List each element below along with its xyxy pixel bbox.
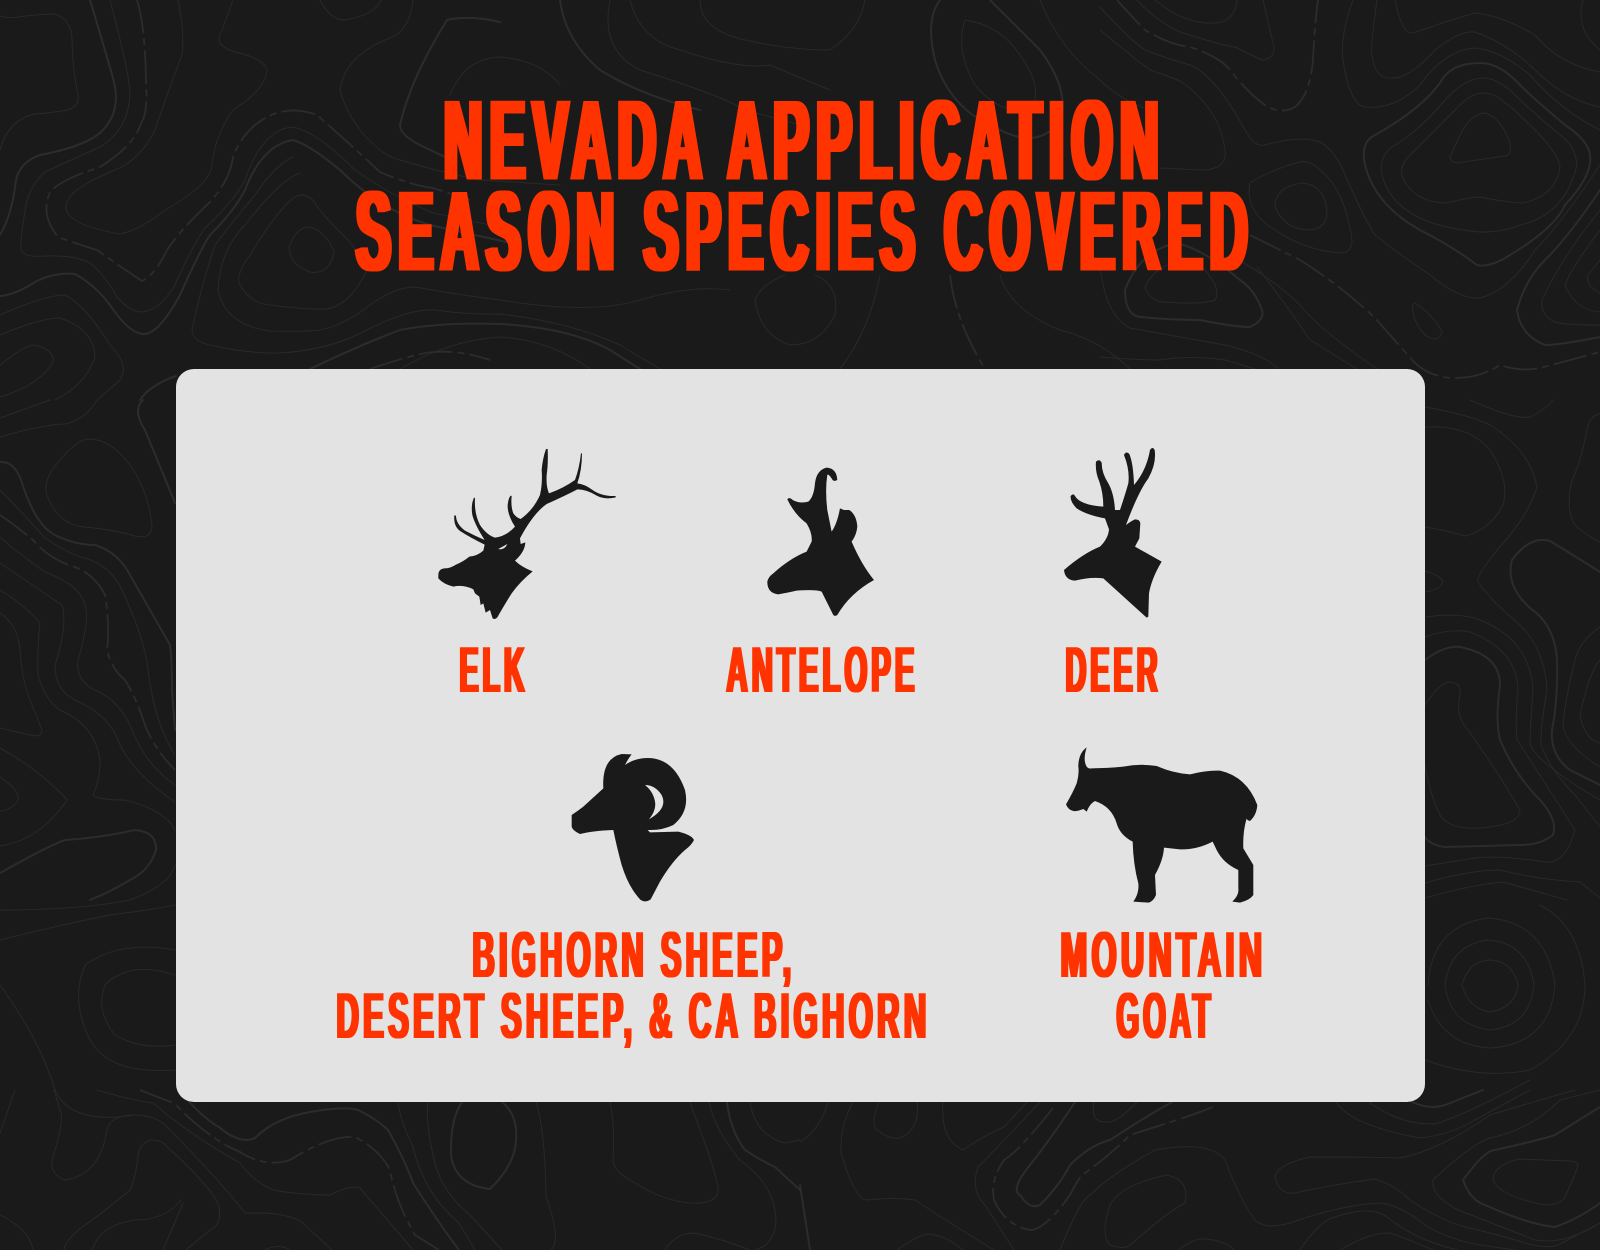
- species: mountain goat: [1060, 747, 1266, 1052]
- label: BIGHORN SHEEP line and DESERT SHEEP line: BIGHORN SHEEP,: [472, 918, 796, 991]
- species: antelope: [726, 468, 918, 706]
- label: BIGHORN SHEEP line and DESERT SHEEP line: [336, 918, 930, 1052]
- species: deer: [1064, 448, 1162, 706]
- icon: mountain goat: [1066, 747, 1257, 903]
- title: [356, 78, 1255, 296]
- species: bighorn sheep: [336, 754, 930, 1052]
- panel: species covered: ANTELOPE: [726, 633, 918, 706]
- panel: species covered: [176, 369, 1425, 1102]
- panel: species covered: DEER: [1066, 633, 1162, 706]
- panel: species covered: DESERT SHEEP, & CA BIGHORN: [336, 979, 930, 1052]
- species: elk: ELK: [460, 633, 528, 706]
- label: MOUNTAIN GOAT: [1060, 918, 1266, 1052]
- icon: bighorn ram head: [572, 754, 694, 901]
- icon: antelope head: [767, 468, 874, 616]
- species: elk: [438, 449, 616, 706]
- label: MOUNTAIN GOAT: GOAT: [1116, 979, 1214, 1052]
- icon: deer head: [1064, 448, 1162, 618]
- panel: species covered: MOUNTAIN: [1060, 918, 1266, 991]
- icon: elk head: [438, 449, 616, 619]
